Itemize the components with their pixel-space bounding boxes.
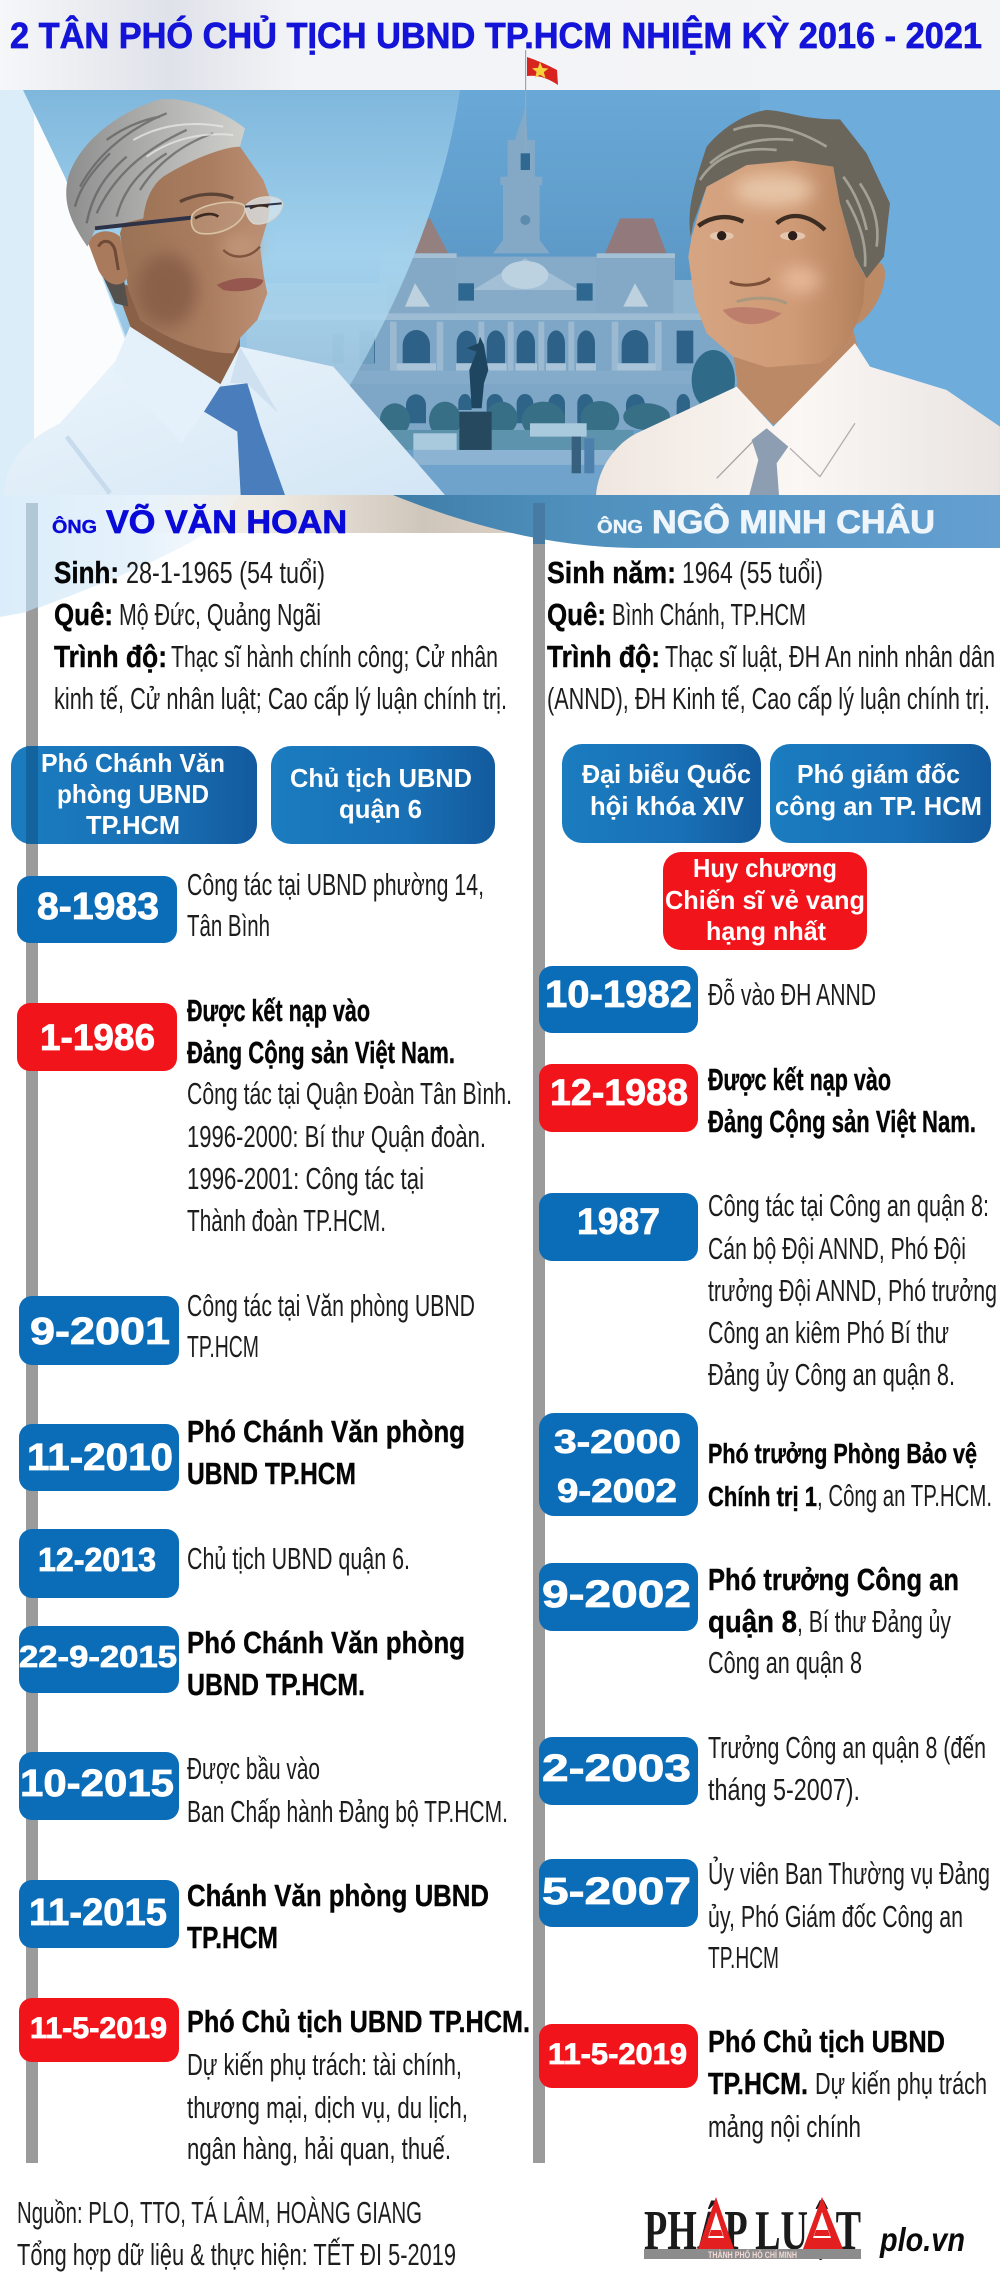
entry 9-2002: quận 8 (708, 1604, 797, 1639)
entry 9-2002: 9-2002 (542, 1574, 691, 1616)
entry 2-2003 (539, 1730, 986, 1807)
trees (380, 350, 735, 438)
entry 12-2013: Chủ tịch UBND quận 6. (187, 1541, 410, 1576)
name strip background (0, 495, 1000, 617)
entry 11-5-2019 right: TP.HCM. (708, 2066, 808, 2101)
light left pane (0, 90, 460, 495)
bio: left: Thạc sĩ hành chính công; Cử nhân (171, 639, 498, 674)
bio: left: Sinh: (54, 555, 119, 590)
tie (204, 383, 285, 495)
position pill: Phó giám đốc công an: Phó giám đốc (797, 759, 960, 789)
title: 2 TÂN PHÓ CHỦ TỊCH UBND TP.HCM NHIỆM KỲ 2016 - 2021 (10, 14, 982, 56)
position pill: Chủ tịch UBND: quận 6 (339, 794, 422, 824)
bio: left: Mộ Đức, Quảng Ngãi (119, 597, 321, 632)
bio: left: Trình độ: (54, 639, 167, 674)
entry 8-1983: Công tác tại UBND phường 14, (187, 867, 484, 902)
entry 22-9-2015 (19, 1625, 465, 1702)
header background (0, 0, 1000, 90)
nose (223, 247, 260, 257)
entry 9-2001: 9-2001 (30, 1311, 170, 1353)
face (120, 147, 271, 353)
entry 11-2015: TP.HCM (187, 1920, 278, 1955)
entry 1-1986: Đảng Cộng sản Việt Nam. (187, 1035, 455, 1070)
glasses (95, 218, 192, 228)
entry 1-1986: 1996-2000: Bí thư Quận đoàn. (187, 1119, 486, 1154)
brows and eyes (180, 194, 233, 202)
entry 11-5-2019 right: mảng nội chính (708, 2109, 861, 2144)
nape hair (100, 270, 128, 307)
entry 1-1986: 1996-2001: Công tác tại (187, 1161, 424, 1196)
entry 12-1988: 12-1988 (550, 1072, 688, 1113)
hair (66, 99, 245, 247)
position pill: Phó giám đốc công an (770, 744, 991, 843)
face (688, 160, 865, 367)
ground (413, 450, 613, 465)
entry 11-5-2019 left: Phó Chủ tịch UBND TP.HCM. (187, 2004, 530, 2039)
entry 5-2007: TP.HCM (708, 1940, 779, 1975)
bio: right: Sinh năm: (547, 555, 676, 590)
entry 1-1986 (17, 993, 512, 1238)
ear (88, 231, 128, 285)
entry 8-1983: Tân Bình (187, 908, 270, 943)
position pill: Phó Chánh Văn phòng (11, 746, 257, 844)
position pill: Đại biểu Quốc hội (562, 744, 761, 843)
entry 3-2000 / 9-2002: Chính trị 1 (708, 1481, 817, 1512)
entry 12-2013 (19, 1529, 410, 1598)
entry 11-2015: 11-2015 (29, 1892, 167, 1934)
entry 10-1982: 10-1982 (545, 974, 692, 1016)
entry 22-9-2015: 22-9-2015 (19, 1639, 177, 1674)
entry 11-5-2019 left: thương mại, dịch vụ, du lịch, (187, 2090, 468, 2125)
entry 3-2000 / 9-2002: 3-2000 (554, 1423, 681, 1460)
timeline left (26, 503, 38, 2163)
entry 10-2015 (19, 1751, 508, 1829)
bio: left: 28-1-1965 (54 tuổi) (126, 555, 325, 590)
entry 9-2001 (19, 1288, 475, 1365)
pole (525, 50, 526, 150)
roofs (390, 218, 448, 253)
right timeline entries (539, 966, 997, 2144)
entry 10-1982 (539, 966, 876, 1033)
entry 11-5-2019 left: Dự kiến phụ trách: tài chính, (187, 2047, 462, 2082)
statue and plinth (467, 337, 488, 408)
entry 22-9-2015: Phó Chánh Văn phòng (187, 1625, 465, 1660)
logo: Pháp Luật (644, 2197, 861, 2262)
entry 11-2015 (19, 1878, 489, 1955)
hair (690, 110, 890, 278)
entry 5-2007 (539, 1855, 990, 1975)
name: Võ Văn Hoan: ÔNG (52, 516, 97, 537)
tie (749, 428, 788, 495)
entry 11-2010: UBND TP.HCM (187, 1456, 356, 1491)
entry 11-2010: 11-2010 (27, 1437, 173, 1479)
logo text: plo.vn: plo.vn (879, 2221, 965, 2258)
entry 8-1983: 8-1983 (37, 886, 159, 928)
mouth (217, 278, 263, 291)
position pill: Chủ tịch UBND: Chủ tịch UBND (290, 763, 472, 793)
entry 3-2000 / 9-2002 (539, 1413, 992, 1516)
entry 10-2015: Được bầu vào (187, 1751, 320, 1786)
bio: right (547, 555, 995, 716)
entry 9-2002: Công an quận 8 (708, 1645, 862, 1680)
entry 1987 (539, 1188, 997, 1392)
entry 3-2000 / 9-2002: 9-2002 (557, 1472, 677, 1509)
pedestrians (572, 437, 581, 473)
bio: left: Quê: (54, 597, 113, 632)
balustrades (397, 363, 656, 371)
flag (527, 57, 558, 85)
award pill: Huy chương: Huy chương (693, 853, 837, 883)
entry 11-5-2019 left: ngân hàng, hải quan, thuế. (187, 2131, 451, 2166)
entry 10-2015: Ban Chấp hành Đảng bộ TP.HCM. (187, 1794, 508, 1829)
entry 5-2007: 5-2007 (542, 1871, 691, 1913)
left timeline entries (17, 867, 530, 2166)
entry 1987: 1987 (577, 1201, 660, 1242)
source credits (17, 2195, 456, 2272)
entry 11-5-2019 right: 11-5-2019 (548, 2038, 687, 2071)
entry 1-1986: Công tác tại Quận Đoàn Tân Bình. (187, 1076, 512, 1111)
entry 10-2015: 10-2015 (20, 1763, 174, 1805)
entry 9-2001: TP.HCM (187, 1329, 259, 1364)
collar (717, 442, 753, 478)
entry 11-2010: Phó Chánh Văn phòng (187, 1414, 465, 1449)
portrait: Võ Văn Hoan (3, 99, 445, 495)
bio: right: Bình Chánh, TP.HCM (612, 597, 806, 632)
entry 9-2001: Công tác tại Văn phòng UBND (187, 1288, 475, 1323)
entry 11-2015: Chánh Văn phòng UBND (187, 1878, 489, 1913)
name: Võ Văn Hoan: VÕ VĂN HOAN (106, 504, 347, 540)
tower (493, 108, 550, 253)
position pill: Chủ tịch UBND (271, 746, 495, 844)
entry 12-1988 (539, 1062, 976, 1139)
entry 1-1986: 1-1986 (40, 1017, 155, 1058)
entry 1-1986: Được kết nạp vào (187, 993, 370, 1028)
arches level two (406, 394, 690, 423)
upper windows (458, 283, 474, 301)
source credits: Nguồn: PLO, TTO, TÁ LÂM, HOÀNG GIANG (17, 2195, 422, 2230)
eyes (710, 232, 734, 240)
photo panel: city hall background (0, 50, 1000, 495)
entry 11-5-2019 left (19, 1998, 530, 2166)
position pill: Phó Chánh Văn phòng: TP.HCM (86, 810, 180, 840)
bio: right: 1964 (55 tuổi) (682, 555, 823, 590)
entry 22-9-2015: UBND TP.HCM. (187, 1667, 365, 1702)
ear (857, 262, 885, 325)
entry 12-2013: 12-2013 (38, 1541, 156, 1578)
bio: right: Quê: (547, 597, 606, 632)
award pill: Huy chương: hạng nhất (706, 916, 826, 946)
entry 9-2002 (539, 1562, 959, 1680)
position pill: Phó Chánh Văn phòng: phòng UBND (57, 779, 209, 809)
position pill: Phó Chánh Văn phòng: Phó Chánh Văn (41, 748, 225, 778)
neck (733, 330, 860, 425)
name: Ngô Minh Châu: ÔNG (597, 516, 643, 537)
award pill: Huy chương (663, 852, 867, 950)
pilasters (390, 322, 662, 372)
portrait: Ngô Minh Châu (596, 110, 1000, 495)
shirt (3, 327, 445, 495)
bio: right: Trình độ: (547, 639, 660, 674)
brows (698, 217, 743, 226)
arches level one (333, 330, 693, 363)
name: Ngô Minh Châu: NGÔ MINH CHÂU (652, 504, 935, 540)
entry 12-1988: Được kết nạp vào (708, 1062, 891, 1097)
bio: left (54, 555, 507, 716)
position pill: Phó giám đốc công an: công an TP. HCM (775, 791, 982, 821)
entry 2-2003: 2-2003 (542, 1748, 691, 1790)
nose (730, 278, 770, 285)
collar (113, 327, 222, 443)
award pill: Huy chương: Chiến sĩ vẻ vang (665, 885, 865, 915)
position pill: Đại biểu Quốc hội: hội khóa XIV (590, 791, 745, 821)
building: Ho Chi Minh City Hall (243, 108, 747, 495)
logo: Pháp Luật: PHÁP LUẬT (644, 2199, 861, 2262)
entry 11-5-2019 left: 11-5-2019 (30, 2012, 167, 2045)
timeline right (533, 503, 545, 2163)
entry 2-2003: tháng 5-2007). (708, 1772, 860, 1807)
neck (113, 280, 240, 387)
bio: left: kinh tế, Cử nhân luật; Cao cấp lý luận chính trị. (54, 681, 507, 716)
entry 11-5-2019 right: Phó Chủ tịch UBND (708, 2024, 945, 2059)
wings and body (247, 307, 747, 430)
shirt (596, 343, 1000, 495)
position pill: Đại biểu Quốc hội: Đại biểu Quốc (582, 759, 751, 789)
logo: Pháp Luật: THÀNH PHỐ HỒ CHÍ MINH (708, 2249, 797, 2260)
entry 1-1986: Thành đoàn TP.HCM. (187, 1203, 386, 1238)
entry 11-2010 (19, 1414, 465, 1491)
entry 11-5-2019 right (539, 2024, 987, 2144)
pediment (473, 258, 578, 290)
source credits: Tổng hợp dữ liệu & thực hiện: TẾT ĐI 5-2019 (17, 2237, 456, 2272)
entry 8-1983 (17, 867, 484, 943)
entry 10-1982: Đỗ vào ĐH ANND (708, 977, 876, 1012)
moustache and mouth (737, 298, 787, 303)
